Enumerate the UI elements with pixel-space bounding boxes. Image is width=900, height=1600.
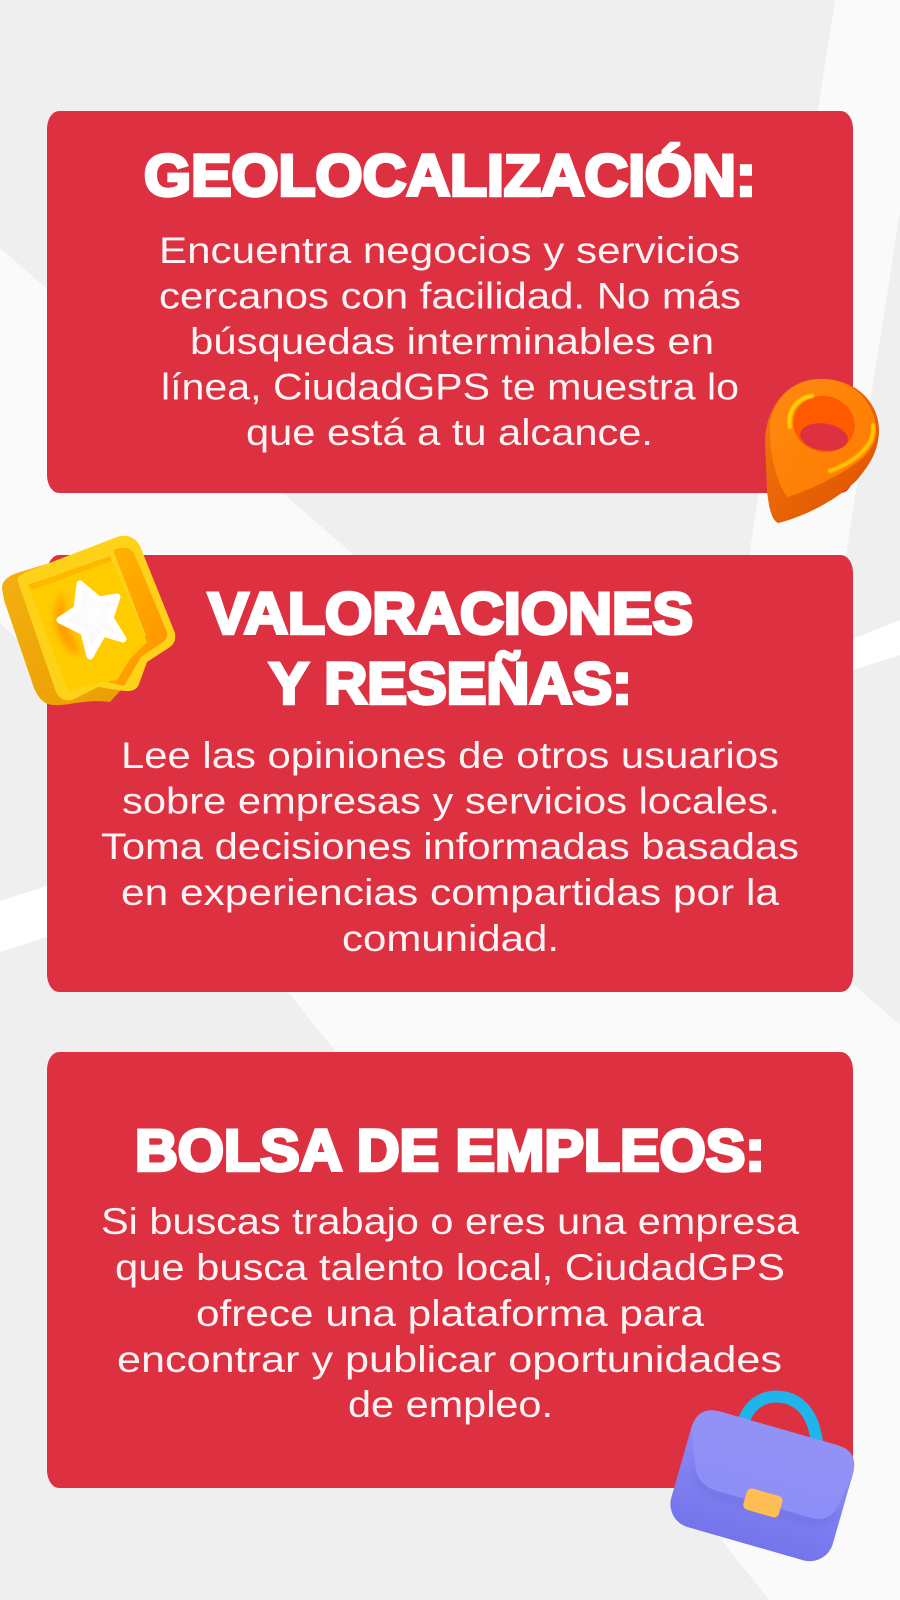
heading: GEOLOCALIZACIÓN: <box>144 144 756 208</box>
body text: Si buscas trabajo o eres una empresa <box>101 1201 799 1242</box>
body text: línea, CiudadGPS te muestra lo <box>161 366 739 408</box>
body text <box>159 230 741 453</box>
icon: location pin <box>765 379 879 523</box>
heading: VALORACIONES <box>208 582 693 646</box>
body text: búsquedas interminables en <box>190 321 714 362</box>
icon: briefcase <box>665 1397 859 1567</box>
panel background <box>47 555 853 992</box>
body text: cercanos con facilidad. No más <box>159 276 741 316</box>
body text: Encuentra negocios y servicios <box>159 230 740 271</box>
body text <box>101 735 799 959</box>
panel background <box>47 111 853 493</box>
body text <box>101 1201 799 1425</box>
panel background <box>47 1052 853 1488</box>
body text: en experiencias compartidas por la <box>121 872 779 913</box>
body text: Toma decisiones informadas basadas <box>101 826 799 867</box>
panel: valoraciones y reseñas <box>47 555 853 992</box>
body text: que está a tu alcance. <box>246 412 653 453</box>
icon: star rating bubble <box>2 536 175 705</box>
case body <box>665 1405 859 1567</box>
body text: de empleo. <box>348 1384 553 1425</box>
panel: geolocalización <box>47 111 853 493</box>
panel: bolsa de empleos <box>47 1052 853 1488</box>
body text: sobre empresas y servicios locales. <box>122 780 780 822</box>
heading <box>208 582 693 716</box>
body text: ofrece una plataforma para <box>196 1293 704 1334</box>
heading: Y RESEÑAS: <box>269 652 632 716</box>
star <box>60 584 123 656</box>
body text: encontrar y publicar oportunidades <box>117 1339 782 1380</box>
body text: comunidad. <box>342 918 559 959</box>
handle <box>744 1397 818 1452</box>
body text: que busca talento local, CiudadGPS <box>115 1247 785 1288</box>
body text: Lee las opiniones de otros usuarios <box>121 735 779 776</box>
heading: BOLSA DE EMPLEOS: <box>135 1118 765 1184</box>
